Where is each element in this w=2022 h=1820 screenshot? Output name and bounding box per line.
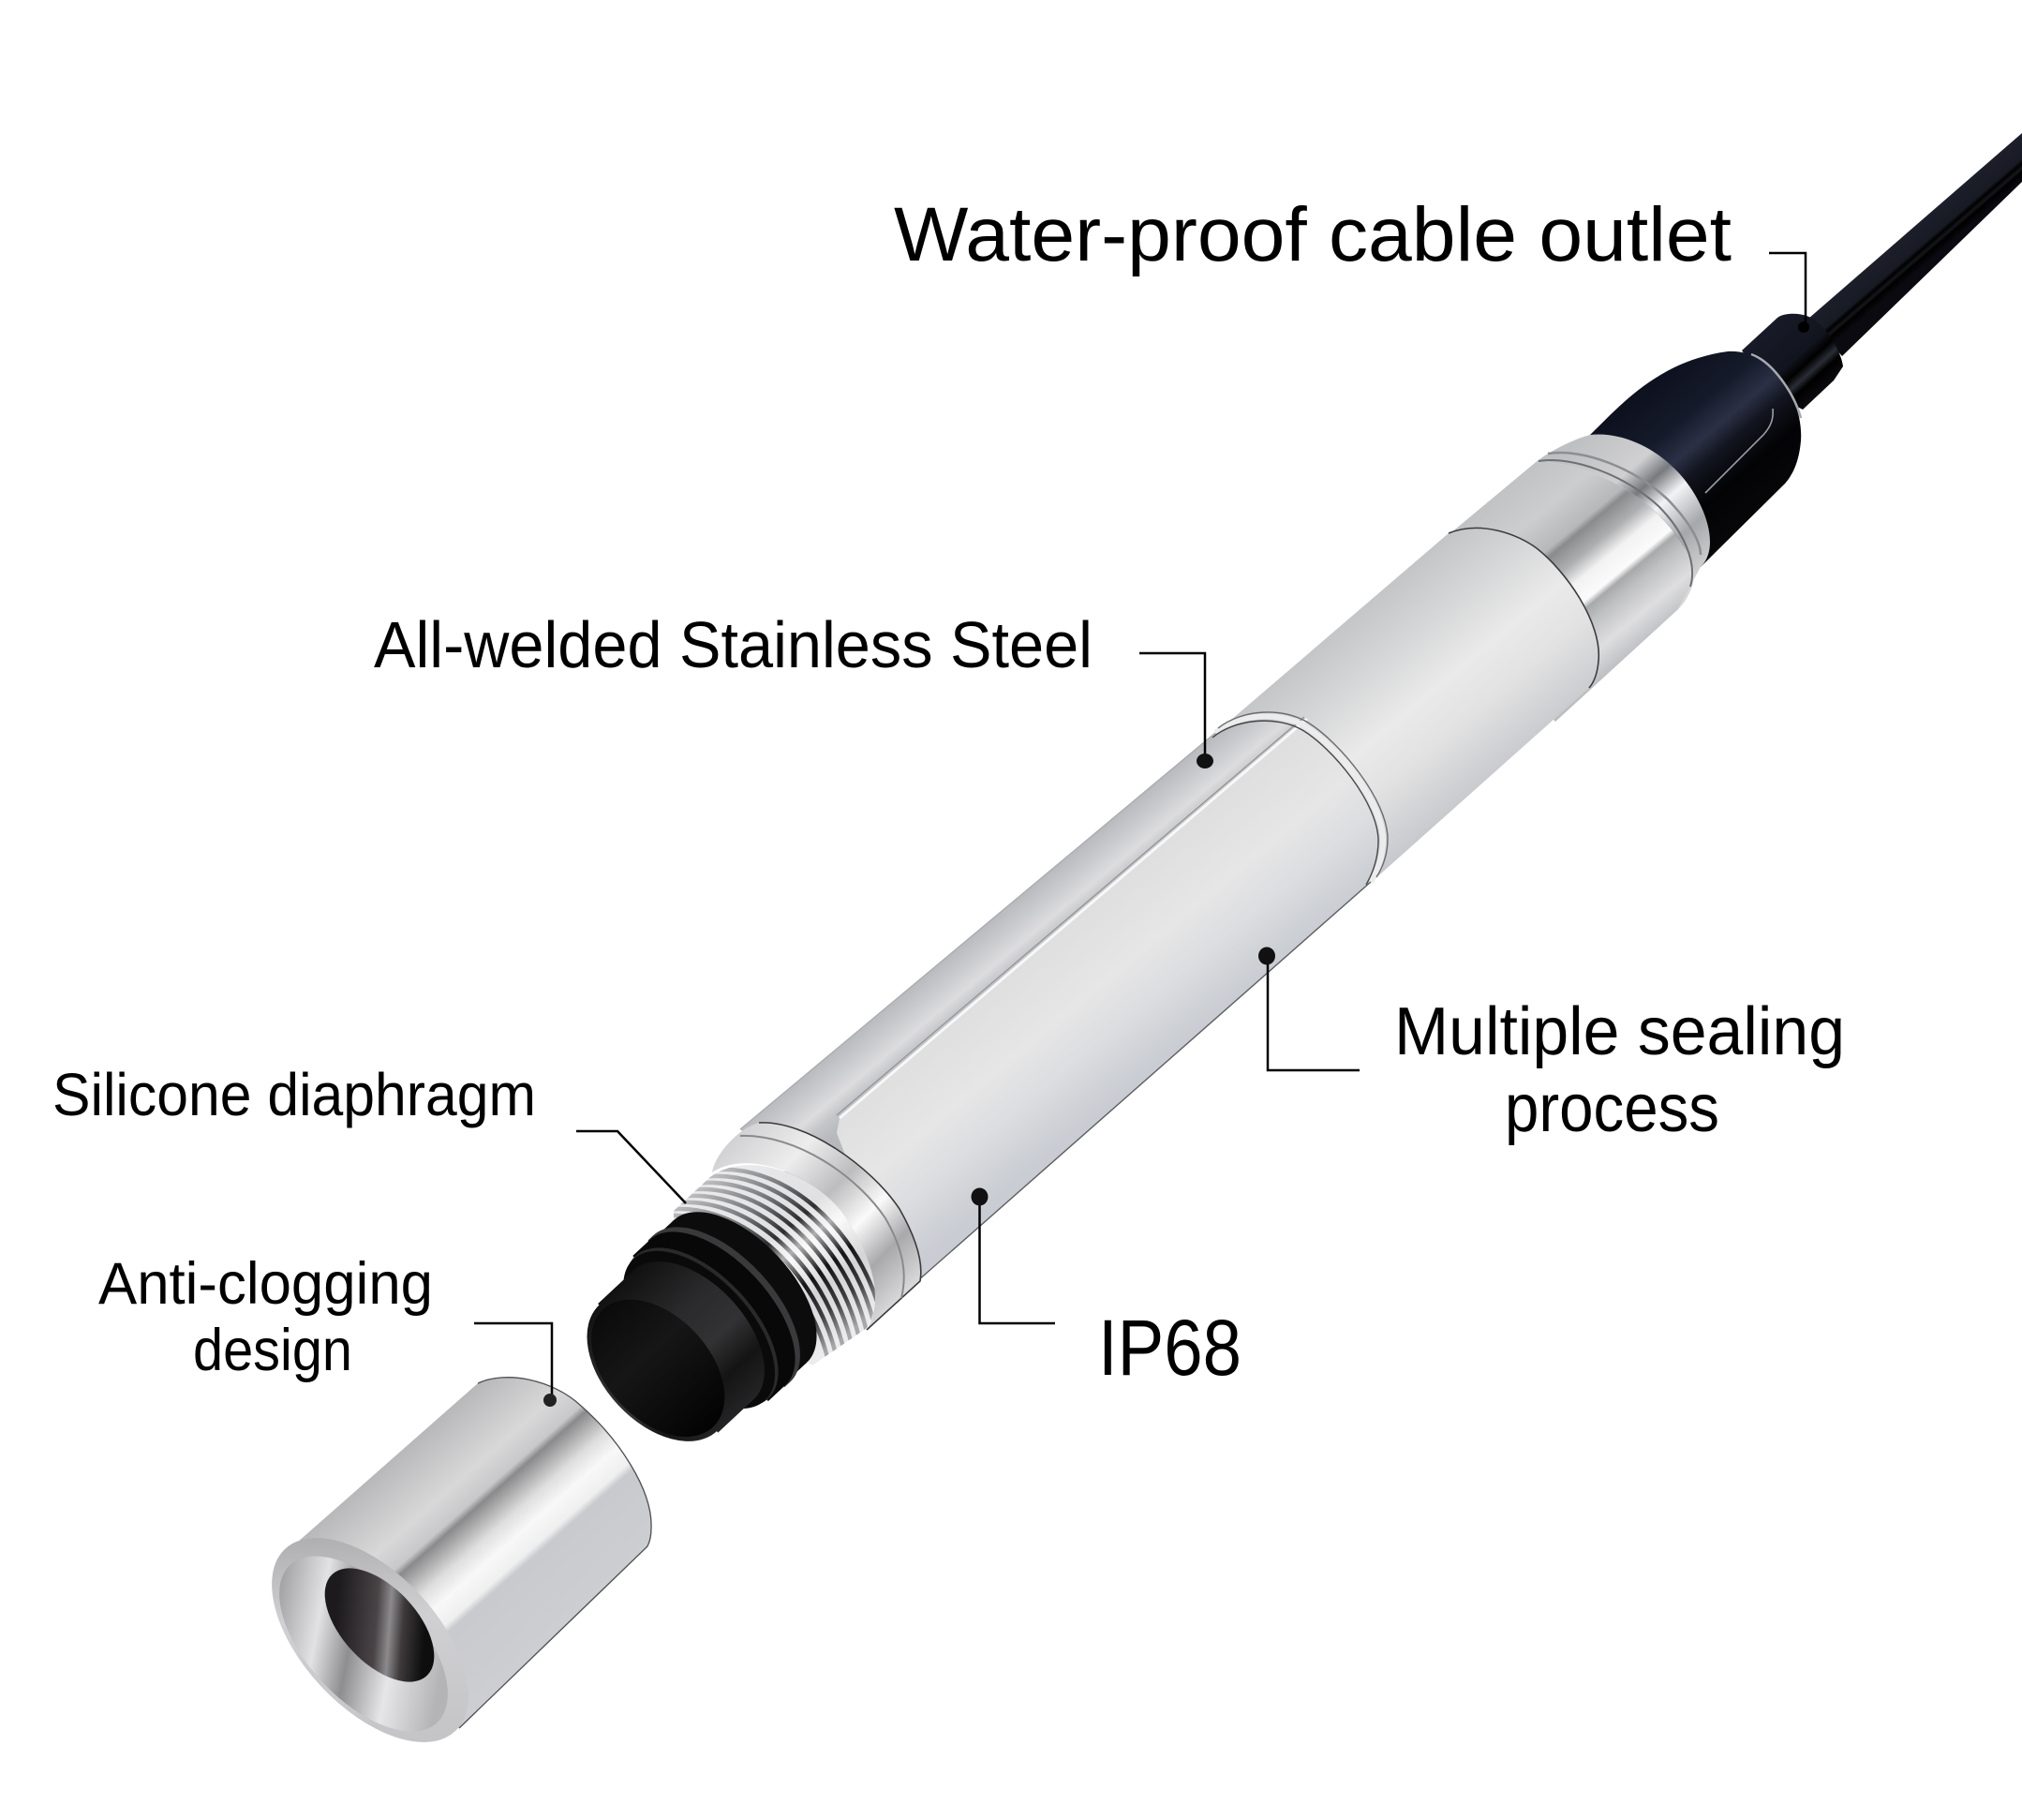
thread flange	[712, 1123, 921, 1330]
cap bore chamfer	[249, 1527, 478, 1761]
label: IP68	[971, 1188, 1241, 1392]
label: Multiple sealing process	[1258, 947, 1845, 1146]
label: IP68: IP68	[1098, 1304, 1241, 1392]
label: Anti-clogging design: Anti-clogging	[98, 1251, 433, 1317]
welded ring on body	[1212, 712, 1388, 885]
label: Silicone diaphragm	[52, 1061, 686, 1203]
upper painted section	[1218, 528, 1598, 881]
cable	[1808, 133, 2022, 356]
lower body section	[740, 716, 1383, 1289]
cap front rim	[236, 1503, 504, 1777]
steel anti-clogging cap	[236, 1378, 651, 1777]
label: Silicone diaphragm: Silicone diaphragm	[52, 1061, 536, 1128]
cable outlet neck	[1742, 314, 1843, 410]
label: Multiple sealing process: Multiple sealing	[1394, 994, 1845, 1069]
lower body light panel	[837, 719, 1383, 1289]
black rubber boot	[1590, 351, 1801, 567]
label: Multiple sealing process: process	[1505, 1071, 1719, 1146]
threaded section	[674, 1165, 875, 1365]
label: All-welded Stainless Steel: All-welded Stainless Steel	[374, 608, 1093, 681]
cap bore opening	[305, 1549, 454, 1701]
label: Anti-clogging design	[98, 1251, 557, 1407]
label: All-welded Stainless Steel	[374, 608, 1213, 768]
label: Anti-clogging design: design	[193, 1318, 352, 1383]
illustration: level sensor body	[236, 133, 2022, 1777]
label: Water-proof cable outlet	[894, 192, 1809, 333]
polished steel tube	[1405, 462, 1694, 722]
black sensor tip	[558, 1235, 792, 1469]
seam arc on upper section	[1449, 528, 1598, 688]
label: Water-proof cable outlet: Water-proof cable outlet	[894, 192, 1732, 277]
black O-ring seat and grooves	[593, 1183, 846, 1439]
welded steel collar ring	[1535, 434, 1710, 610]
